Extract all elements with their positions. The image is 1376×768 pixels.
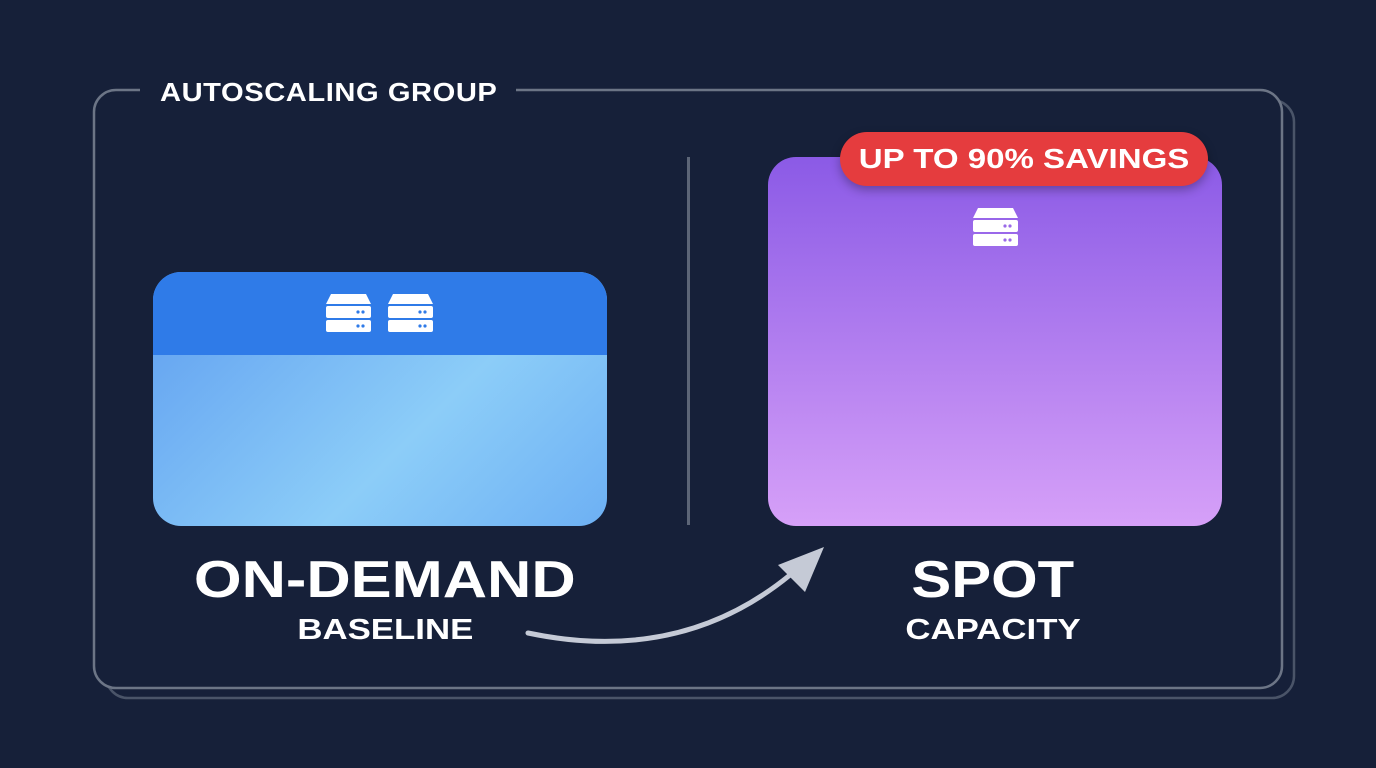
sublabel: capacity: CAPACITY xyxy=(905,614,1081,646)
icon: servers xyxy=(326,294,433,332)
icon: server xyxy=(973,208,1018,246)
divider xyxy=(687,157,690,525)
panel: spot card xyxy=(768,157,1222,526)
label: on-demand: ON-DEMAND xyxy=(194,551,576,609)
sublabel: baseline: BASELINE xyxy=(297,614,473,646)
heading: autoscaling group: AUTOSCALING GROUP xyxy=(160,77,497,107)
panel: on-demand card xyxy=(153,272,607,526)
label: spot: SPOT xyxy=(912,551,1074,609)
badge: savings xyxy=(840,132,1208,186)
badge: savings: UP TO 90% SAVINGS xyxy=(859,143,1189,174)
